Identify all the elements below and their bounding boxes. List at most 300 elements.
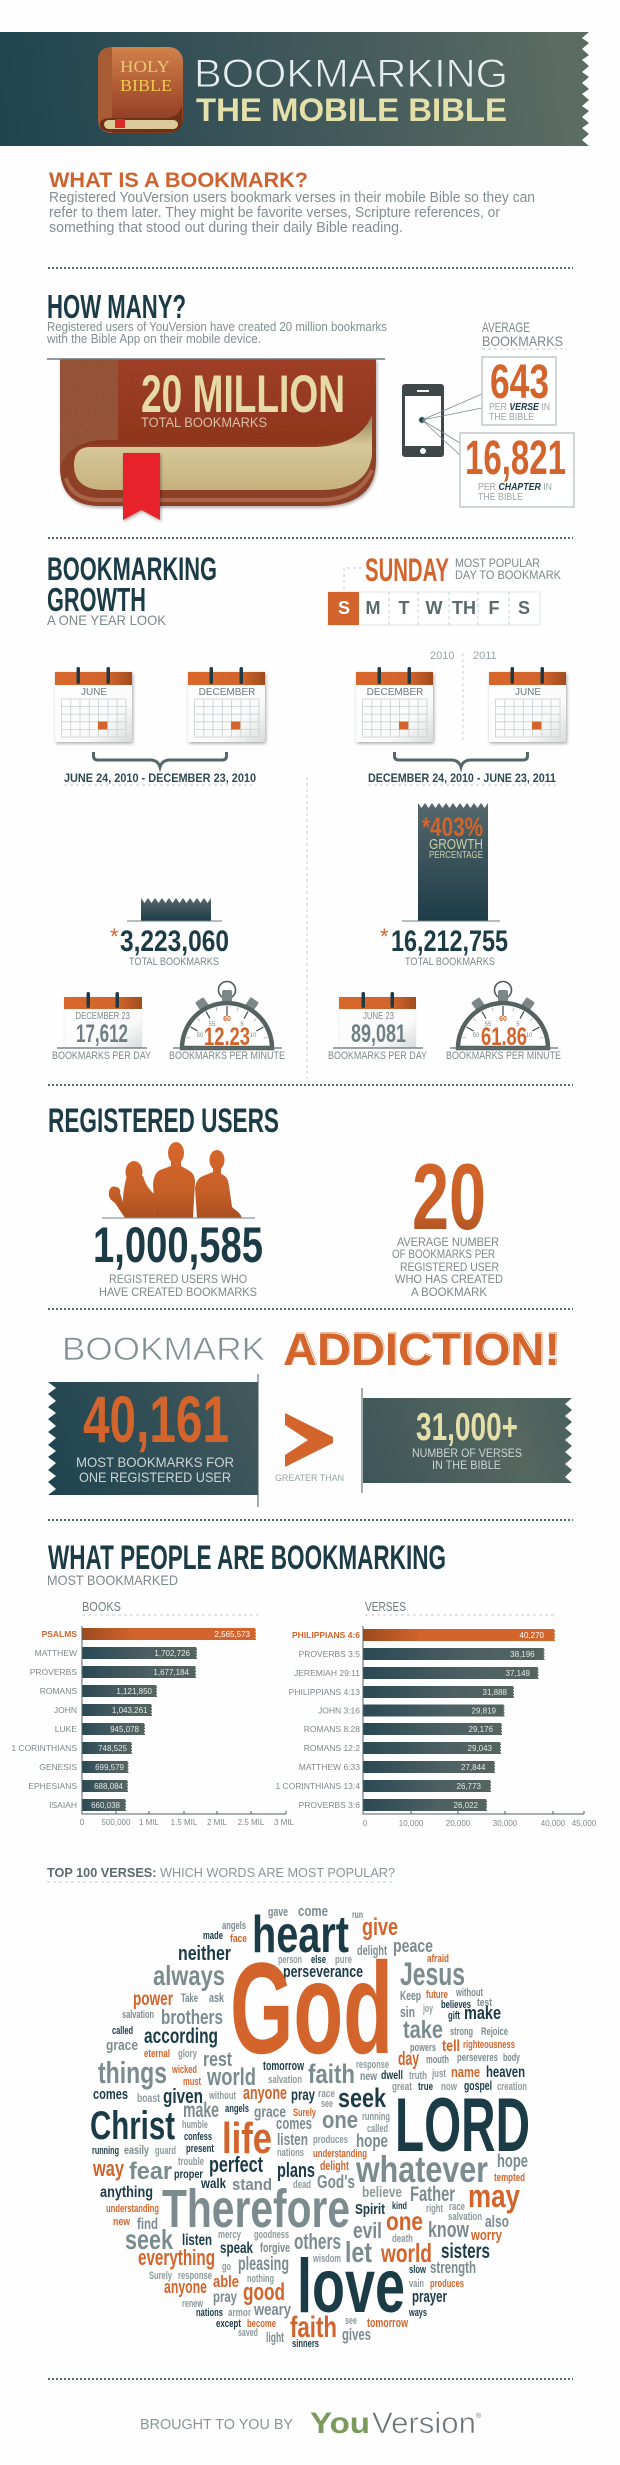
word cloud: fear: [129, 2158, 172, 2185]
word cloud: faith: [290, 2311, 337, 2344]
heading: [62, 1323, 561, 1375]
bar chart: books: 2 MIL: [207, 1818, 228, 1827]
word cloud: take: [403, 2016, 443, 2044]
bookmarks per day first: 17,612: [76, 1020, 128, 1048]
logo: YouVersion: You: [310, 2407, 370, 2440]
word cloud: wisdom: [312, 2253, 341, 2265]
brace left: [94, 752, 226, 767]
word cloud: afraid: [427, 1953, 449, 1965]
weekday strip: TH: [452, 598, 476, 618]
word cloud: come: [298, 1903, 328, 1920]
word cloud: hope: [497, 2151, 528, 2171]
bar chart: books: 2.5 MIL: [238, 1818, 265, 1827]
average caption: WHO HAS CREATED: [395, 1272, 503, 1286]
growth percentage: *403%: [422, 812, 483, 842]
word cloud: comes: [276, 2114, 312, 2133]
icon: holy bible app: HOLY: [120, 57, 170, 76]
weekday strip: M: [366, 598, 380, 618]
heading: HOW MANY?: [47, 288, 186, 325]
calendar: december: DECEMBER: [199, 687, 255, 698]
bar chart: books: 500,000: [102, 1818, 131, 1827]
word cloud: see: [321, 2098, 333, 2110]
word cloud: Jesus: [400, 1956, 465, 1992]
word cloud: others: [294, 2229, 341, 2254]
word cloud: understanding: [106, 2203, 159, 2215]
big number: average: 20: [412, 1144, 486, 1249]
bar chart: books: EPHESIANS: [28, 1781, 77, 1791]
bar chart: books: MATTHEW: [35, 1648, 77, 1658]
word cloud: world: [206, 2064, 256, 2091]
word cloud: faith: [308, 2059, 355, 2089]
intro text: with the Bible App on their mobile device.: [46, 332, 261, 346]
ribbon: most bookmarks: ONE REGISTERED USER: [79, 1469, 231, 1485]
connector lines: [422, 394, 482, 457]
word cloud: tomorrow: [263, 2058, 305, 2073]
bar chart: books: 699,579: [95, 1763, 125, 1772]
intro text: [46, 320, 387, 346]
ribbon: most bookmarks: [48, 1374, 258, 1507]
word cloud: find: [137, 2216, 158, 2233]
average bookmarks heading: [482, 319, 567, 349]
word cloud: sisters: [441, 2240, 490, 2263]
section: what people are bookmarking: [11, 1539, 597, 1882]
bar chart: books: [11, 1599, 295, 1827]
bar chart: verses: JOHN 3:16: [318, 1706, 360, 1716]
word cloud: see: [345, 2315, 357, 2327]
heading: ADDICTION!: [284, 1323, 561, 1374]
subheading: MOST BOOKMARKED: [47, 1572, 178, 1588]
bookmarks per day second: JUNE 23: [363, 1011, 394, 1022]
word cloud: heart: [252, 1906, 349, 1964]
bar chart: verses: 29,176: [469, 1725, 494, 1734]
big number label: TOTAL BOOKMARKS: [141, 414, 267, 430]
users caption: REGISTERED USERS WHO: [109, 1272, 247, 1286]
bookmarks per day second: 89,081: [351, 1020, 406, 1048]
bar chart: verses: PROVERBS 3:6: [299, 1800, 360, 1810]
word cloud: confess: [184, 2131, 212, 2143]
growth percentage: [422, 812, 483, 861]
word cloud: eternal: [144, 2048, 170, 2060]
callout: per verse: [482, 356, 556, 425]
callout: per chapter: [460, 432, 574, 507]
total second period: 16,212,755: [391, 925, 508, 958]
word cloud: body: [503, 2052, 521, 2064]
word cloud: evil: [353, 2218, 382, 2243]
icon: people silhouette: [102, 1142, 255, 1218]
most popular day: SUNDAY: [365, 552, 449, 588]
body text: Registered YouVersion users bookmark verses in their mobile Bible so they can: [49, 190, 535, 206]
word cloud: humble: [182, 2119, 208, 2131]
word cloud: one: [386, 2206, 423, 2236]
word cloud: seek: [338, 2083, 387, 2113]
bar chart: verses: 29,819: [472, 1706, 497, 1716]
word cloud: produces: [430, 2278, 464, 2290]
word cloud: renew: [182, 2298, 203, 2310]
bar chart: verses: 27,844: [461, 1763, 486, 1772]
stopwatch second: 10: [526, 1033, 533, 1039]
word cloud: mouth: [426, 2054, 449, 2066]
calendar: june: JUNE: [81, 687, 107, 698]
stopwatch second: 50: [473, 1033, 480, 1039]
word cloud: walk: [200, 2175, 226, 2191]
title line 2: THE MOBILE BIBLE: [196, 92, 507, 128]
bar chart: books: 1,121,850: [116, 1687, 153, 1696]
year labels: 2011: [473, 650, 497, 662]
bar chart: verses: 1 CORINTHIANS 13:4: [275, 1781, 360, 1791]
word cloud: made: [203, 1930, 223, 1942]
word cloud: speak: [220, 2240, 253, 2257]
word cloud: delight: [357, 1942, 387, 1958]
bar chart: verses: ROMANS 12:2: [304, 1743, 360, 1753]
word cloud: believe: [362, 2184, 402, 2201]
word cloud: also: [485, 2212, 509, 2231]
word cloud: Keep: [400, 1988, 421, 2003]
word cloud: slow: [409, 2264, 426, 2276]
body text: [49, 190, 535, 236]
bar chart: verses: 31,888: [483, 1688, 508, 1697]
icon: holy bible app: BIBLE: [120, 76, 172, 95]
stopwatch first: 55: [209, 1022, 216, 1028]
word cloud: true: [418, 2081, 433, 2093]
word cloud: pray: [213, 2289, 237, 2306]
word cloud: else: [311, 1954, 326, 1966]
stopwatch second: 61.86: [481, 1023, 527, 1051]
word cloud: go: [222, 2261, 231, 2273]
heading: GROWTH: [47, 581, 146, 618]
weekday strip: S: [338, 598, 350, 618]
word cloud: ways: [408, 2307, 427, 2319]
word cloud: powers: [410, 2042, 436, 2054]
word cloud: right: [426, 2203, 443, 2215]
word cloud: way: [92, 2156, 125, 2181]
word cloud: running: [92, 2145, 119, 2157]
word cloud: future: [426, 1989, 448, 2001]
bar chart: books: PROVERBS: [30, 1667, 77, 1677]
word cloud: given: [163, 2086, 203, 2108]
ribbon: verses in bible: 31,000+: [416, 1406, 518, 1449]
word cloud: everything: [138, 2245, 215, 2270]
bar chart: verses: [275, 1599, 597, 1828]
word cloud: grace: [106, 2037, 138, 2054]
stopwatch first: 60: [223, 1016, 231, 1023]
word cloud: guard: [155, 2145, 176, 2157]
bar chart: books: 748,525: [98, 1744, 128, 1753]
word cloud: delight: [320, 2158, 349, 2173]
word cloud: vain: [409, 2278, 424, 2290]
bar chart: books: 1,702,726: [154, 1649, 191, 1658]
word cloud: always: [153, 1960, 225, 1991]
word cloud: [90, 1903, 530, 2350]
bar chart: verses: 26,022: [454, 1801, 479, 1810]
stopwatch first: 10: [250, 1033, 257, 1039]
heading: WHAT IS A BOOKMARK?: [49, 169, 308, 192]
bar chart: books: 0: [80, 1818, 85, 1827]
word cloud: Father: [410, 2183, 455, 2206]
average caption: OF BOOKMARKS PER: [392, 1247, 495, 1261]
body text: something that stood out during their daily Bible reading.: [49, 220, 403, 236]
word cloud: understanding: [313, 2148, 367, 2160]
stopwatch first: 5: [240, 1022, 244, 1028]
word cloud: pray: [291, 2087, 315, 2104]
average caption: A BOOKMARK: [411, 1285, 487, 1299]
bar chart: verses: JEREMIAH 29:11: [294, 1668, 360, 1678]
callout: per chapter: 16,821: [465, 432, 566, 485]
word cloud: dwell: [381, 2068, 403, 2082]
word cloud: God's: [317, 2172, 355, 2192]
bar chart: verses: 38,196: [510, 1650, 535, 1659]
word cloud: new: [360, 2069, 377, 2083]
bar chart: verses: PHILIPPIANS 4:13: [289, 1687, 360, 1697]
word cloud: seek: [125, 2224, 173, 2255]
word cloud: kind: [392, 2201, 407, 2212]
word cloud: just: [431, 2068, 446, 2080]
bar chart: verses: 30,000: [493, 1819, 518, 1828]
bar chart: books: 1 CORINTHIANS: [11, 1743, 77, 1753]
banner ribbon: [0, 32, 589, 146]
word cloud: Surely: [149, 2270, 173, 2282]
word cloud: become: [247, 2318, 276, 2330]
word cloud: salvation: [448, 2211, 482, 2223]
footer credit: [140, 2407, 482, 2440]
word cloud: death: [392, 2233, 413, 2245]
growth bar: first period: [127, 898, 222, 921]
stopwatch first: 12.23: [204, 1023, 250, 1051]
word cloud: forgive: [260, 2240, 290, 2255]
bar chart: books: 1 MIL: [139, 1818, 160, 1827]
bar chart: verses: PHILIPPIANS 4:6: [292, 1630, 360, 1640]
bar chart: books: LUKE: [55, 1724, 77, 1734]
word cloud: prayer: [412, 2287, 447, 2306]
word cloud: love: [297, 2244, 405, 2329]
stopwatch first: BOOKMARKS PER MINUTE: [169, 1050, 285, 1062]
growth percentage: GROWTH: [429, 836, 483, 853]
word cloud heading: TOP 100 VERSES: WHICH WORDS ARE MOST POPULAR?: [47, 1866, 395, 1880]
growth bar: second period: [402, 803, 500, 921]
word cloud: goodness: [254, 2229, 289, 2241]
word cloud: ask: [209, 1990, 225, 2005]
bar chart: verses: 26,773: [457, 1782, 482, 1791]
word cloud: rest: [203, 2049, 232, 2071]
word cloud: test: [477, 1997, 492, 2009]
most popular day: DAY TO BOOKMARK: [455, 568, 561, 582]
word cloud: saved: [238, 2327, 258, 2339]
word cloud: may: [468, 2178, 520, 2214]
total first period: [110, 924, 229, 968]
average caption: [392, 1235, 503, 1299]
stopwatch second: 60: [499, 1016, 507, 1023]
bookmarks per day first: DECEMBER 23: [76, 1011, 130, 1022]
intro text: Registered users of YouVersion have created 20 million bookmarks: [47, 320, 387, 334]
word cloud: tell: [442, 2038, 460, 2055]
word cloud: things: [98, 2055, 167, 2090]
word cloud: except: [216, 2318, 241, 2330]
word cloud: LORD: [395, 2083, 530, 2168]
word cloud: pleasing: [238, 2254, 289, 2275]
word cloud: Therefore: [162, 2179, 350, 2239]
total second period: *: [380, 924, 389, 949]
word cloud: comes: [93, 2086, 128, 2103]
word cloud: sinners: [292, 2338, 319, 2350]
section: how many: [46, 288, 574, 520]
logo: YouVersion: Version: [372, 2407, 476, 2440]
word cloud: person: [278, 1954, 302, 1966]
logo: YouVersion: ®: [476, 2412, 482, 2420]
bookmark ribbon: [123, 453, 160, 520]
illustration: leather book: [47, 359, 385, 520]
bar chart: verses: 29,043: [468, 1744, 493, 1753]
calendar: december: DECEMBER: [367, 687, 423, 698]
icon: holy bible app: [98, 47, 183, 133]
word cloud: without: [455, 1987, 483, 1999]
heading: BOOKMARKING: [47, 551, 217, 587]
greater than symbol: GREATER THAN: [275, 1473, 344, 1484]
growth percentage: PERCENTAGE: [429, 850, 483, 861]
word cloud: able: [213, 2272, 239, 2291]
body text: refer to them later. They might be favorite verses, Scripture references, or: [49, 205, 500, 221]
weekday strip: W: [426, 598, 442, 618]
word cloud: trouble: [178, 2156, 204, 2168]
word cloud: listen: [277, 2130, 308, 2149]
word cloud: make: [464, 2003, 501, 2023]
word cloud: life: [222, 2114, 272, 2163]
word cloud: new: [113, 2216, 130, 2228]
calendar: december: [356, 667, 433, 742]
section: what is a bookmark: [49, 169, 535, 236]
bar chart: books: 3 MIL: [274, 1818, 295, 1827]
users caption: HAVE CREATED BOOKMARKS: [99, 1285, 257, 1299]
total second period: [380, 924, 508, 968]
word cloud: must: [183, 2076, 201, 2088]
bar chart: books: BOOKS: [82, 1599, 121, 1614]
total second period: TOTAL BOOKMARKS: [405, 956, 495, 968]
section: registered users: [48, 1102, 503, 1299]
word cloud: without: [208, 2090, 236, 2102]
year labels: 2010: [430, 650, 454, 662]
word cloud: light: [266, 2329, 284, 2345]
bookmarks per day first: BOOKMARKS PER DAY: [52, 1050, 152, 1062]
ribbon: most bookmarks: 40,161: [83, 1382, 229, 1456]
bar chart: books: ISAIAH: [49, 1800, 77, 1810]
heading: REGISTERED USERS: [48, 1102, 279, 1140]
word cloud: name: [451, 2064, 480, 2081]
bar chart: verses: 10,000: [399, 1819, 424, 1828]
word cloud: run: [352, 1910, 363, 1921]
word cloud: produces: [313, 2134, 348, 2146]
word cloud: whatever: [355, 2149, 488, 2190]
callout: per chapter: THE BIBLE: [478, 492, 523, 503]
bookmarks per day second: BOOKMARKS PER DAY: [328, 1050, 428, 1062]
word cloud: believes: [441, 1999, 471, 2011]
word cloud: salvation: [122, 2009, 154, 2021]
heading: A ONE YEAR LOOK: [47, 612, 167, 628]
word cloud: let: [345, 2237, 372, 2269]
heading: ADDICTION!: [283, 1324, 560, 1375]
title line 1: BOOKMARKING: [194, 52, 508, 96]
word cloud: nothing: [247, 2273, 274, 2285]
big number: 20 MILLION: [141, 365, 345, 424]
stopwatch first: [169, 982, 285, 1062]
word cloud: response: [356, 2059, 389, 2071]
word cloud: gave: [268, 1904, 288, 1919]
bar chart: books: 1,043,261: [112, 1706, 148, 1715]
word cloud: sin: [400, 2004, 415, 2021]
bar chart: books: 945,078: [110, 1725, 140, 1734]
word cloud: anyone: [164, 2277, 207, 2297]
bar chart: verses: 40,270: [520, 1631, 545, 1640]
bar chart: books: 660,038: [91, 1801, 121, 1810]
bookmarks per day second: [328, 992, 428, 1062]
calendar: june: [489, 667, 566, 742]
word cloud: righteousness: [463, 2039, 515, 2051]
stopwatch second: [446, 982, 561, 1062]
word cloud: give: [362, 1914, 398, 1941]
word cloud: worry: [470, 2227, 502, 2244]
total first period: TOTAL BOOKMARKS: [129, 956, 219, 968]
bar chart: books: 688,084: [94, 1782, 124, 1791]
word cloud: Spirit: [355, 2201, 385, 2218]
word cloud: mercy: [218, 2229, 242, 2241]
word cloud: great: [392, 2081, 412, 2093]
callout: per verse: THE BIBLE: [489, 412, 534, 423]
stopwatch second: BOOKMARKS PER MINUTE: [446, 1050, 561, 1062]
word cloud: strength: [430, 2258, 476, 2277]
word cloud: plans: [277, 2160, 315, 2182]
bar chart: verses: 45,000: [572, 1819, 597, 1828]
ribbon: most bookmarks: MOST BOOKMARKS FOR: [76, 1454, 234, 1470]
word cloud: Take: [181, 1991, 198, 2005]
word cloud: pure: [335, 1954, 352, 1966]
section: bookmarking growth: [47, 551, 566, 1079]
word cloud: heaven: [486, 2064, 525, 2081]
users caption: [99, 1272, 257, 1299]
word cloud: gift: [448, 2010, 460, 2022]
bar chart: books: 2,565,573: [214, 1630, 251, 1639]
word cloud: perfect: [209, 2152, 263, 2177]
icon: phone: [402, 384, 444, 457]
average bookmarks heading: AVERAGE: [482, 319, 530, 335]
bar chart: books: 1,677,184: [153, 1668, 190, 1677]
word cloud: gospel: [464, 2078, 492, 2093]
callout: per chapter: PER CHAPTER IN: [478, 482, 552, 493]
bar chart: books: 1.5 MIL: [171, 1818, 198, 1827]
word cloud: easily: [124, 2143, 149, 2157]
bar chart: verses: VERSES: [365, 1599, 406, 1614]
word cloud: present: [186, 2143, 214, 2155]
word cloud: armor: [228, 2307, 252, 2319]
weekday strip: T: [398, 598, 410, 618]
stopwatch first: 50: [197, 1033, 204, 1039]
bar chart: books: ROMANS: [40, 1686, 77, 1696]
heading: BOOKMARK: [62, 1331, 265, 1367]
word cloud: angels: [222, 1920, 246, 1932]
section: bookmark addiction: [48, 1323, 572, 1507]
word cloud: called: [367, 2123, 388, 2135]
word cloud: joy: [422, 2003, 434, 2015]
word cloud: grace: [254, 2104, 286, 2121]
bar chart: verses: MATTHEW 6:33: [299, 1762, 360, 1772]
word cloud: brothers: [161, 2007, 223, 2029]
date range right: DECEMBER 24, 2010 - JUNE 23, 2011: [368, 771, 556, 785]
word cloud: running: [362, 2111, 390, 2123]
word cloud: nations: [277, 2147, 304, 2159]
word cloud: called: [112, 2025, 133, 2037]
word cloud: tempted: [494, 2172, 525, 2184]
big number: users: 1,000,585: [93, 1217, 263, 1273]
word cloud: hope: [356, 2131, 388, 2151]
word cloud: glory: [178, 2048, 198, 2060]
weekday strip: S: [518, 598, 530, 618]
weekday strip: [328, 592, 540, 625]
